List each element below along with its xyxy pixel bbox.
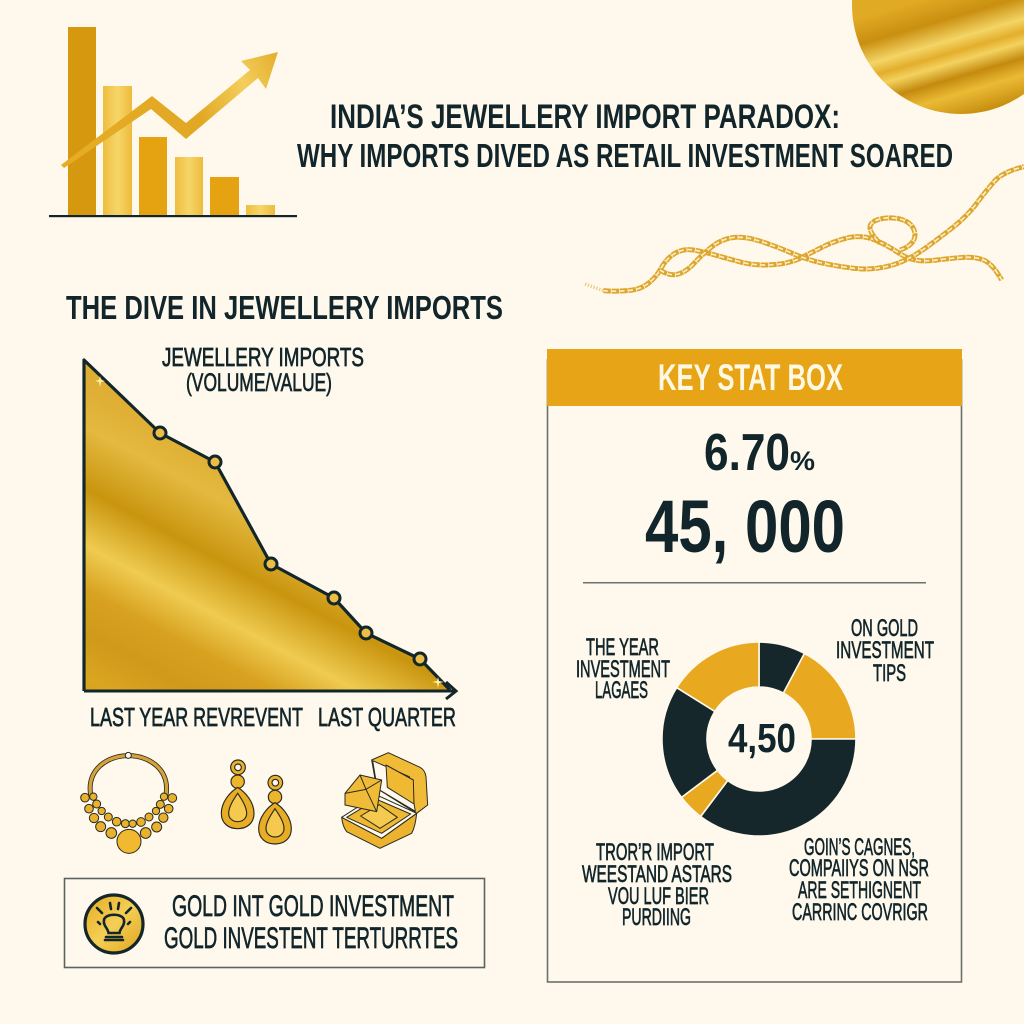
label: imports note: VOU LUF BIER: [608, 883, 709, 910]
donut center value: 4,50: [728, 715, 796, 761]
stat: 6.70%: 6.70: [704, 424, 790, 482]
label: companies note: ARE SETHIGNENT: [798, 877, 921, 904]
panel header: KEY STAT BOX: [658, 357, 843, 398]
title: INDIA’S JEWELLERY IMPORT PARADOX:: [330, 98, 840, 136]
donut chart: [662, 642, 856, 836]
decoration: gold chain: [585, 167, 1024, 291]
label: imports note: WEESTAND ASTARS: [582, 861, 732, 888]
callout: gold investment tip: [64, 878, 484, 968]
panel header: [547, 349, 962, 406]
label: on gold investment tips: TIPS: [873, 660, 906, 687]
label: companies note: COMPAIIYS ON NSR: [789, 855, 929, 882]
label: on gold investment tips: ON GOLD: [851, 615, 918, 642]
chart label: [162, 342, 364, 397]
label: the year investment: INVESTMENT: [576, 656, 670, 683]
label: the year investment: THE YEAR: [586, 634, 659, 661]
label: imports note: TROR’R IMPORT: [596, 839, 714, 866]
label: the year investment: LAGAES: [595, 677, 648, 704]
callout: gold investment tip: GOLD INT GOLD INVESTMENT: [172, 890, 454, 923]
icon: earrings: [221, 760, 291, 844]
stat: 6.70%: %: [790, 446, 815, 476]
axis labels: LAST YEAR REVREVENT: [90, 702, 303, 732]
icon: necklace: [81, 752, 177, 853]
panel: key stat box: [547, 349, 962, 982]
label: imports note: PURDIING: [622, 904, 691, 931]
chart label: JEWELLERY IMPORTS: [162, 342, 364, 372]
label: imports note: [582, 839, 732, 931]
label: on gold investment tips: INVESTMENT: [836, 637, 934, 664]
decoration: gold circle: [852, 0, 1024, 114]
label: the year investment: [576, 634, 670, 704]
stat: 45,000: 45, 000: [645, 485, 845, 568]
label: companies note: CARRINC COVRIGR: [792, 899, 928, 926]
icon: light bulb badge: [85, 895, 143, 953]
label: companies note: GOIN’S CAGNES,: [804, 834, 915, 861]
title: [297, 98, 953, 174]
chart label: (VOLUME/VALUE): [186, 369, 332, 397]
label: on gold investment tips: [836, 615, 934, 687]
area chart: jewellery imports decline: [84, 360, 456, 699]
axis labels: LAST QUARTER: [318, 702, 456, 732]
label: companies note: [789, 834, 929, 926]
callout: gold investment tip: GOLD INVESTENT TERTURRTES: [164, 922, 458, 955]
icon: ring box: [342, 753, 428, 848]
icon: bar chart with rising arrow: [49, 27, 297, 217]
heading: the dive in jewellery imports: THE DIVE IN JEWELLERY IMPORTS: [66, 289, 503, 326]
